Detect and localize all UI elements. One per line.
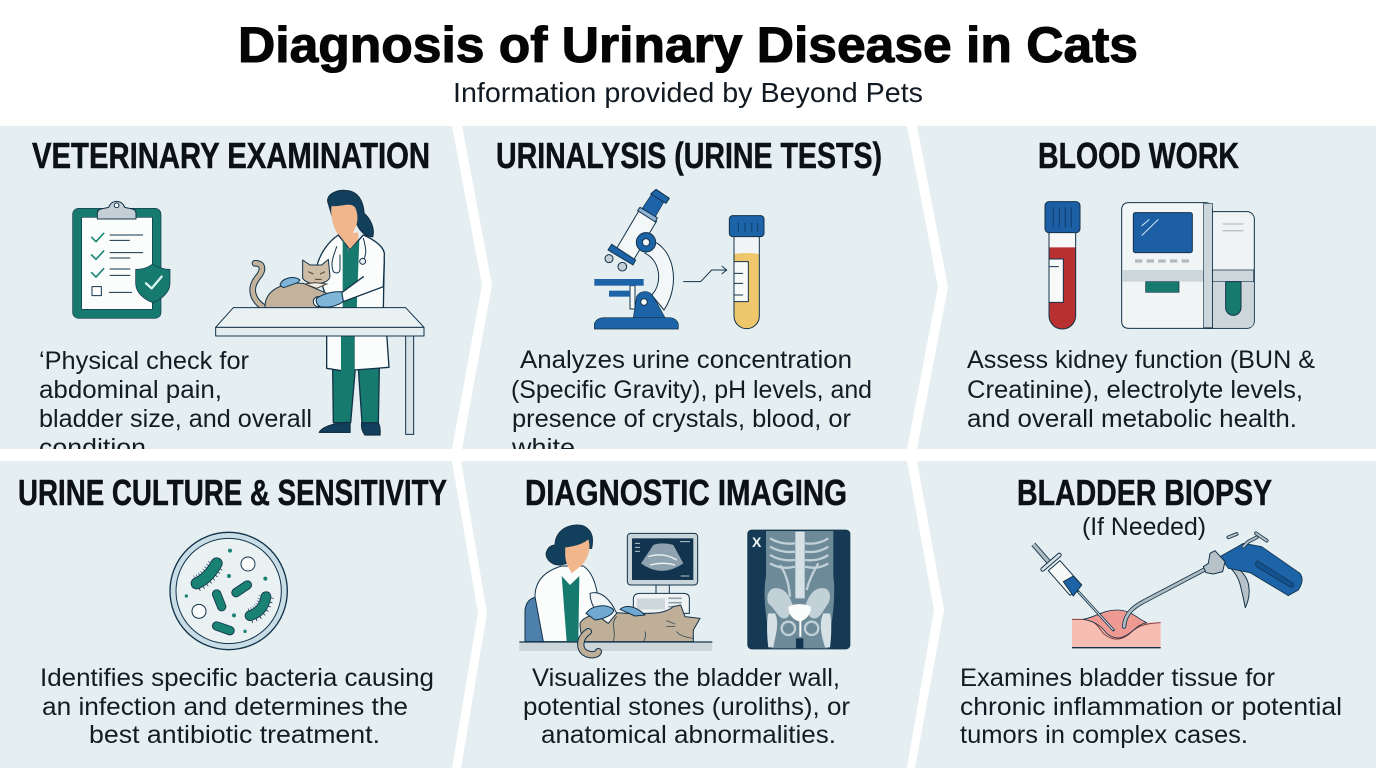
heading: diagnostic imaging: DIAGNOSTIC IMAGING bbox=[525, 472, 847, 513]
panel: urinalysis bbox=[462, 126, 938, 462]
description: bladder biopsy: tumors in complex cases. bbox=[960, 721, 1248, 749]
description: urine culture: best antibiotic treatment. bbox=[89, 721, 380, 749]
arrow: sample to tube bbox=[683, 266, 727, 282]
panel: blood work bbox=[917, 126, 1376, 449]
subheading: if needed: (If Needed) bbox=[1082, 513, 1206, 541]
description: urinalysis bbox=[512, 350, 870, 449]
description: urinalysis: Analyzes urine concentration bbox=[520, 346, 852, 374]
description: bladder biopsy: Examines bladder tissue for bbox=[960, 664, 1275, 692]
heading: bladder biopsy: BLADDER BIOPSY bbox=[1017, 472, 1272, 513]
description: diagnostic imaging bbox=[523, 664, 850, 749]
panel: diagnostic imaging bbox=[461, 461, 934, 768]
description: bladder biopsy: chronic inflammation or potential bbox=[960, 693, 1342, 721]
description: diagnostic imaging: potential stones (uroliths), or bbox=[523, 693, 850, 721]
description: blood work: and overall metabolic health. bbox=[967, 405, 1297, 433]
icon: microscope bbox=[594, 189, 678, 329]
description: diagnostic imaging: anatomical abnormalities. bbox=[541, 721, 836, 749]
description: blood work: Assess kidney function (BUN & bbox=[967, 346, 1315, 374]
description: blood work bbox=[967, 346, 1315, 433]
heading: urinalysis: URINALYSIS (URINE TESTS) bbox=[496, 135, 882, 176]
x-ray marker: X bbox=[752, 534, 762, 550]
description: urinalysis: white bbox=[511, 434, 575, 462]
description: urine culture: Identifies specific bacteria causing bbox=[40, 664, 434, 692]
panel: bladder biopsy bbox=[915, 461, 1376, 768]
icon: urine test tube bbox=[729, 216, 764, 329]
illustration: abdominal x-ray bbox=[748, 530, 850, 649]
description: veterinary examination: abdominal pain, bbox=[39, 376, 222, 404]
heading: blood work: BLOOD WORK bbox=[1038, 135, 1239, 176]
description: veterinary examination: bladder size, and overall bbox=[39, 405, 312, 433]
subtitle: Information provided by Beyond Pets bbox=[453, 77, 923, 108]
heading: veterinary examination: VETERINARY EXAMINATION bbox=[32, 135, 430, 176]
panel: veterinary examination bbox=[0, 126, 482, 462]
description: urinalysis: (Specific Gravity), pH levels, and bbox=[511, 376, 872, 404]
description: urinalysis: presence of crystals, blood, or bbox=[512, 405, 851, 433]
illustration: vet examining cat on table bbox=[216, 190, 424, 435]
description: urine culture bbox=[40, 664, 434, 749]
illustration: vet performing ultrasound on cat bbox=[519, 525, 712, 655]
description: veterinary examination: ‘Physical check for bbox=[39, 347, 249, 375]
heading: urine culture and sensitivity: URINE CULTURE & SENSITIVITY bbox=[18, 472, 447, 513]
icon: blood tube bbox=[1045, 202, 1080, 329]
icon: clipboard checklist with shield bbox=[73, 201, 170, 318]
icon: tissue with syringe and biopsy instrument bbox=[1033, 533, 1302, 648]
description: blood work: Creatinine), electrolyte levels, bbox=[967, 376, 1303, 404]
description: veterinary examination bbox=[40, 351, 310, 449]
description: veterinary examination: condition bbox=[39, 434, 146, 462]
panel: urine culture and sensitivity bbox=[0, 461, 478, 768]
icon: blood analyzer machine bbox=[1122, 203, 1254, 328]
icon: petri dish with bacteria bbox=[170, 532, 287, 650]
description: urine culture: an infection and determines the bbox=[42, 693, 408, 721]
description: diagnostic imaging: Visualizes the bladder wall, bbox=[532, 664, 840, 692]
title: Diagnosis of Urinary Disease in Cats bbox=[238, 17, 1138, 73]
description: bladder biopsy bbox=[960, 664, 1342, 749]
